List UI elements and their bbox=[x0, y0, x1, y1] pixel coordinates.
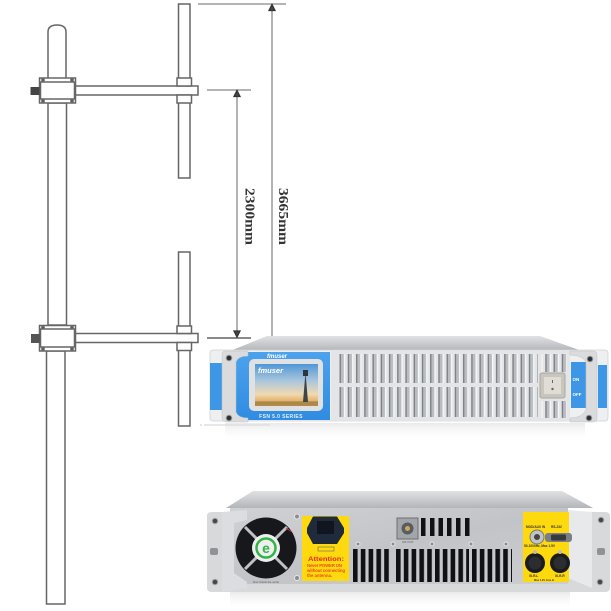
vent slots bbox=[340, 354, 566, 418]
rear bracket bbox=[207, 512, 610, 592]
inlet socket bbox=[317, 521, 334, 534]
upper mast clamp bbox=[40, 78, 76, 103]
attention heading: Attention: bbox=[308, 556, 344, 563]
right xlr bbox=[550, 550, 570, 573]
attention body: the antenna. bbox=[307, 573, 332, 578]
upper boom arm bbox=[75, 86, 198, 95]
fan: e bbox=[262, 540, 270, 556]
logo: fmuser bbox=[267, 354, 288, 360]
power inlet bbox=[307, 516, 344, 544]
bnc connector bbox=[530, 530, 544, 544]
screen bbox=[255, 364, 318, 406]
right blue panel bbox=[571, 362, 586, 408]
ear slots bbox=[210, 548, 605, 555]
fan bbox=[236, 518, 296, 578]
rear face bbox=[230, 508, 568, 584]
rear ear screws bbox=[212, 517, 604, 585]
screws bbox=[294, 514, 508, 580]
main mast lower bbox=[46, 351, 65, 604]
on off labels bbox=[572, 377, 582, 397]
lower boom arm bbox=[75, 334, 198, 342]
on off labels: OFF bbox=[572, 392, 582, 397]
dimension 3665mm bbox=[198, 4, 286, 336]
rack bracket bbox=[210, 350, 608, 421]
upper vent bbox=[421, 518, 470, 536]
fuse icon bbox=[318, 547, 334, 551]
rs232 connector bbox=[545, 533, 572, 542]
attention body bbox=[306, 563, 345, 578]
rf output connector bbox=[397, 518, 418, 539]
right handle bbox=[570, 351, 597, 422]
left handle bbox=[222, 351, 248, 422]
right yellow label bbox=[523, 512, 572, 582]
left blue strip bbox=[210, 363, 222, 410]
screen frame bbox=[249, 359, 323, 411]
rf label: RF OUT bbox=[402, 540, 414, 544]
series label: FSN 5.0 SERIES bbox=[259, 414, 303, 420]
lower mast clamp bbox=[40, 326, 76, 351]
front panel transmitter bbox=[210, 336, 608, 441]
bottom tick bbox=[200, 424, 270, 426]
left xlr bbox=[525, 550, 545, 573]
attention body: Never POWER ON bbox=[307, 563, 342, 568]
tower bbox=[303, 370, 308, 402]
right blue strip bbox=[598, 365, 607, 408]
blue panel bbox=[233, 352, 330, 420]
input labels: RS-232 bbox=[551, 525, 562, 529]
on off labels: ON bbox=[572, 377, 579, 382]
screen logo: fmuser bbox=[258, 366, 284, 375]
input labels: XLR-R bbox=[555, 574, 565, 578]
lower vents bbox=[353, 549, 512, 582]
power switch bbox=[540, 373, 565, 398]
antenna drawing bbox=[40, 4, 198, 604]
attention body: without connecting bbox=[306, 568, 345, 573]
label 3665mm: 3665mm bbox=[276, 188, 291, 246]
right handle bbox=[568, 510, 592, 588]
main mast upper bbox=[48, 25, 66, 78]
input labels: 50-1000Hz, Max 1.5V bbox=[524, 544, 556, 548]
upper dipole element bbox=[178, 4, 190, 178]
upper connector bbox=[30, 87, 40, 95]
input labels: MOD/AUX IN bbox=[526, 525, 546, 529]
chassis top bbox=[226, 491, 593, 508]
main mast middle bbox=[48, 103, 66, 325]
rear panel transmitter bbox=[207, 491, 610, 610]
input labels bbox=[524, 525, 565, 582]
lower connector bbox=[31, 334, 40, 343]
upper dipole collar bbox=[177, 78, 192, 103]
vent panel bbox=[331, 351, 570, 420]
label 2300mm: 2300mm bbox=[242, 188, 258, 246]
reflection bbox=[225, 423, 585, 441]
lower dipole element bbox=[178, 252, 190, 426]
left handle bbox=[222, 510, 247, 592]
lower dipole collar bbox=[177, 326, 192, 350]
chassis top bbox=[230, 336, 582, 351]
input labels: Max 1.0V Line In bbox=[534, 578, 555, 582]
fan caption: Don't block the vents bbox=[253, 580, 280, 584]
input labels: XLR-L bbox=[529, 574, 538, 578]
dimension 2300mm bbox=[207, 90, 251, 338]
reflection bbox=[230, 592, 570, 610]
left yellow label bbox=[302, 516, 349, 581]
front screws bbox=[226, 355, 593, 421]
